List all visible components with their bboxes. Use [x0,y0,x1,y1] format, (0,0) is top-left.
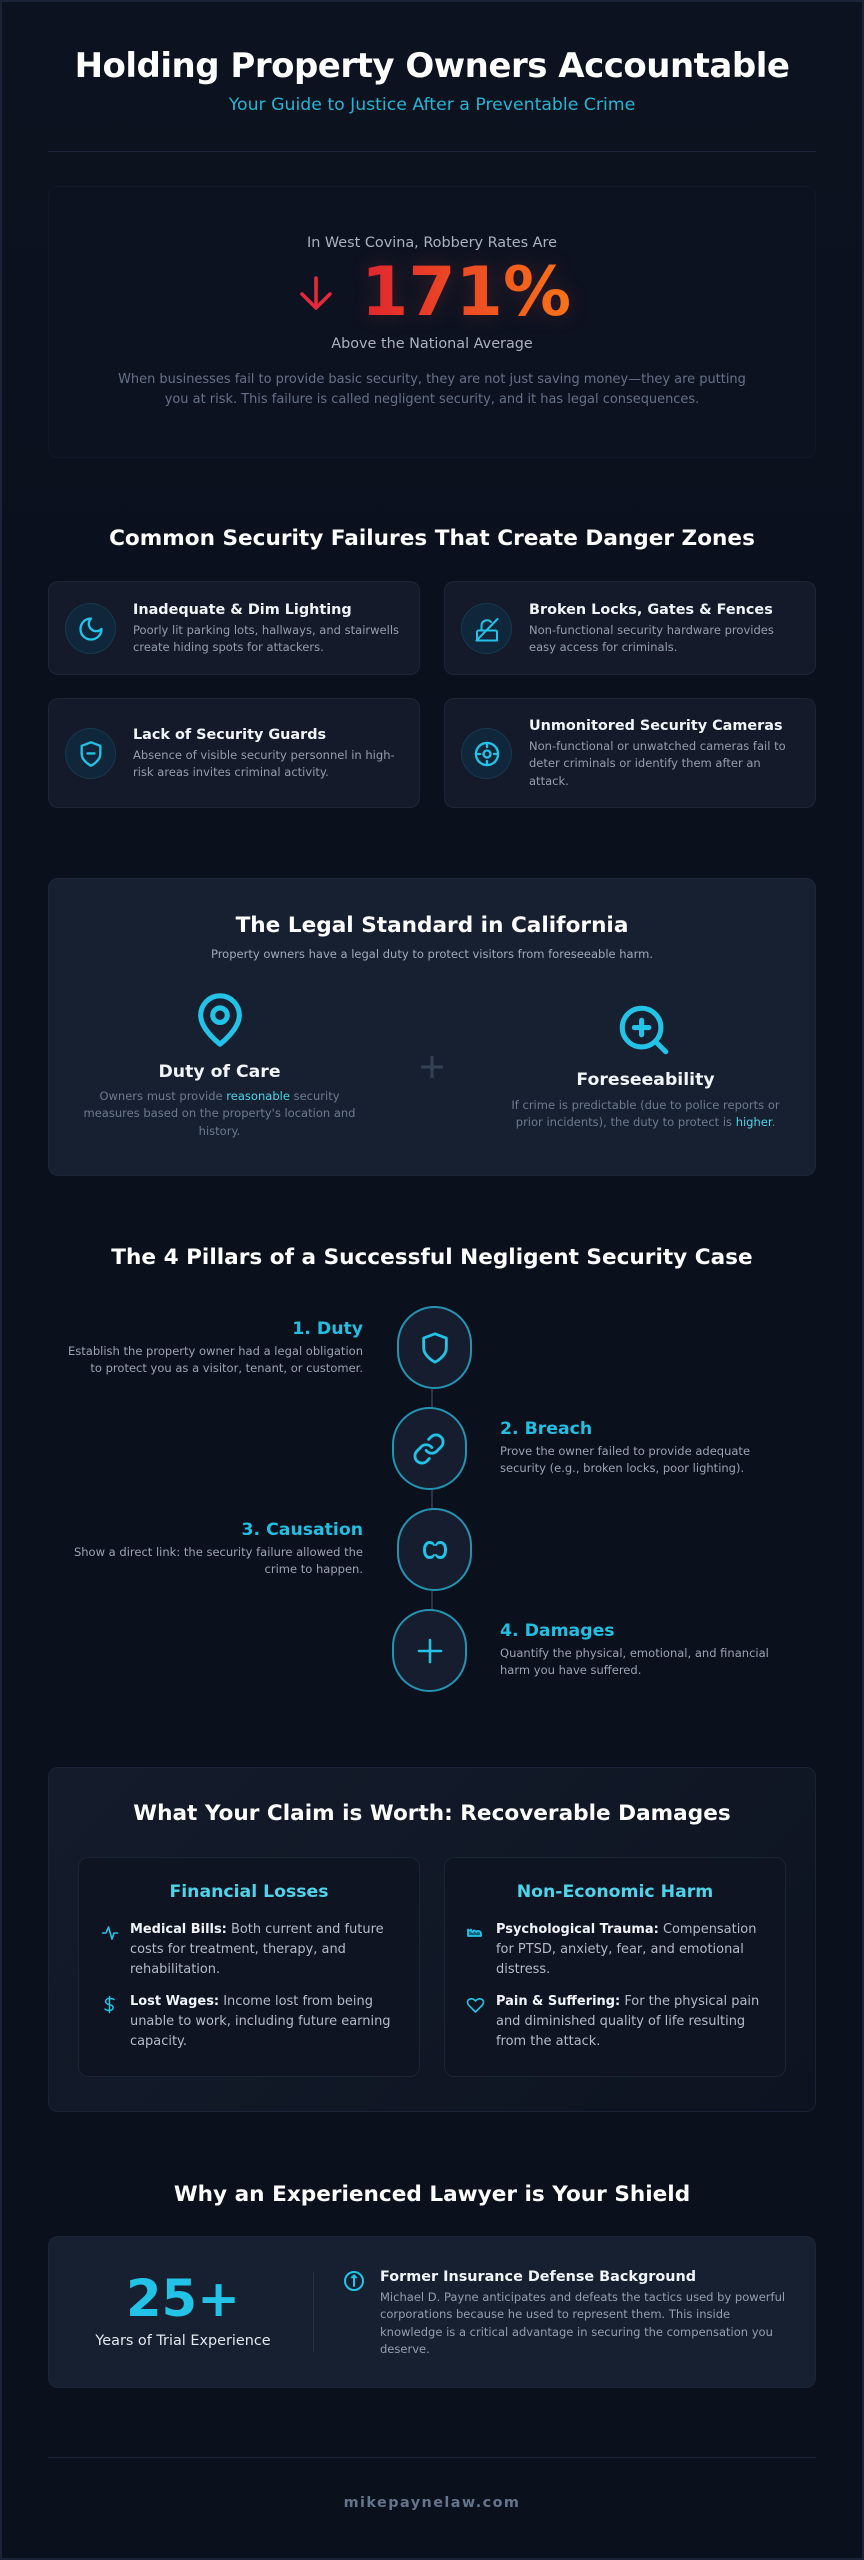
pillar description: Establish the property owner had a legal obligation [68,1344,363,1358]
card heading: Non-Economic Harm [517,1882,713,1902]
item: pain and suffering: Pain & Suffering: For the physical pain [496,1994,759,2009]
heading: common security failures: Common Security Failures That Create Danger Zones [109,526,755,551]
icon: map pin [198,993,242,1047]
years stat number: 25+ [126,2269,240,2329]
icon: shield with minus [65,728,116,779]
item: medical bills: costs for treatment, therapy, and [130,1942,346,1957]
pillar description: Prove the owner failed to provide adequate [500,1444,750,1458]
pillar description [74,1545,363,1576]
pillar description: Show a direct link: the security failure allowed the [74,1545,363,1559]
item: psychological trauma: distress. [496,1962,550,1977]
duty of care text: history. [199,1124,240,1138]
icon: insurance key [344,2271,364,2291]
pillar title: 4. Damages [500,1621,615,1641]
defense background text: Michael D. Payne anticipates and defeats the tactics used by powerful [380,2290,785,2304]
panel: recoverable damages [48,1767,816,2112]
card title: Lack of Security Guards [133,727,326,743]
subtitle: Your Guide to Justice After a Preventable Crime [229,95,635,115]
foreseeability title: Foreseeability [576,1070,715,1090]
duty of care text [83,1089,356,1138]
card description [133,748,395,779]
card: guards [48,698,420,808]
defense background text [380,2290,785,2356]
pillar description [500,1444,750,1475]
pillar 1: duty text [68,1319,363,1375]
hero paragraph: When businesses fail to provide basic security, they are not just saving money—they are putting [118,372,746,387]
card description: Absence of visible security personnel in high- [133,748,395,762]
column: duty of care [83,993,356,1138]
item: medical bills: rehabilitation. [130,1962,220,1977]
card description: Poorly lit parking lots, hallways, and stairwells [133,623,399,637]
duty of care text: Owners must provide reasonable security [99,1089,340,1103]
card: locks [444,581,816,675]
icon: broken lock [461,603,512,654]
item: medical bills: Medical Bills: Both current and future [130,1922,384,1937]
duty of care text: measures based on the property's location and [83,1106,356,1120]
card description: Non-functional or unwatched cameras fail to [529,739,786,753]
card: non-economic harm [444,1857,786,2077]
heading: four pillars: The 4 Pillars of a Successful Negligent Security Case [111,1245,753,1270]
panel intro: Property owners have a legal duty to protect visitors from foreseeable harm. [211,947,653,961]
item: lost wages: unable to work, including future earning [130,2014,391,2029]
card description [529,739,786,788]
column: foreseeability [511,1006,780,1129]
foreseeability text: If crime is predictable (due to police reports or [511,1098,780,1112]
icon: heart [466,1998,484,2013]
pillar 3: causation icon [397,1508,472,1591]
pillar description: harm you have suffered. [500,1663,641,1677]
card description: deter criminals or identify them after an [529,756,761,770]
heading: experienced lawyer: Why an Experienced Lawyer is Your Shield [174,2182,690,2207]
card: financial losses [78,1857,420,2077]
card description: Non-functional security hardware provides [529,623,774,637]
card title: Inadequate & Dim Lighting [133,602,352,618]
icon: moon [65,603,116,654]
pillar title: 3. Causation [242,1520,363,1540]
card description: attack. [529,774,569,788]
panel heading: The Legal Standard in California [236,913,628,938]
defense background title: Former Insurance Defense Background [380,2269,696,2285]
foreseeability text: prior incidents), the duty to protect is higher. [516,1115,775,1129]
panel: hero statistic [48,186,816,458]
item: medical bills [130,1922,384,1977]
card description [529,623,774,654]
defense background text: deserve. [380,2342,430,2356]
pillar 2: breach text [500,1419,750,1475]
card heading: Financial Losses [169,1882,329,1902]
title: Holding Property Owners Accountable [75,46,789,86]
card description: easy access for criminals. [529,640,677,654]
big number 171%: 171% [361,253,571,332]
pillar description: Quantify the physical, emotional, and financial [500,1646,769,1660]
item: pain and suffering [496,1994,759,2049]
item: psychological trauma: Psychological Trauma: Compensation [496,1922,756,1937]
duty of care title: Duty of Care [158,1062,281,1082]
card title: Broken Locks, Gates & Fences [529,602,773,618]
pillar 2: link icon [392,1407,467,1490]
icon: brain [467,1928,482,1937]
icon: plus connector [421,1056,443,1078]
icon: camera target [461,728,512,779]
card description [133,623,399,654]
card title: Unmonitored Security Cameras [529,718,783,734]
pillar 3: causation text [74,1520,363,1576]
defense background text: knowledge is a critical advantage in securing the compensation you [380,2325,773,2339]
panel: legal standard [48,878,816,1176]
pillar 4: plus icon [392,1609,467,1692]
icon: magnifier [620,1006,668,1054]
item: lost wages [130,1994,391,2049]
hero paragraph: you at risk. This failure is called negligent security, and it has legal consequences. [165,392,699,407]
item: lost wages: Lost Wages: Income lost from being [130,1994,373,2009]
card: cameras [444,698,816,808]
item: psychological trauma: for PTSD, anxiety, fear, and emotional [496,1942,744,1957]
item: psychological trauma [496,1922,756,1977]
panel heading: What Your Claim is Worth: Recoverable Damages [133,1801,731,1826]
item: pain and suffering: from the attack. [496,2034,600,2049]
pillar 4: damages text [500,1621,769,1677]
card: lighting [48,581,420,675]
pillar description: security (e.g., broken locks, poor lighting). [500,1461,744,1475]
pillar description [68,1344,363,1375]
stat outro text: Above the National Average [331,336,533,352]
pillar description: crime to happen. [265,1562,363,1576]
item: pain and suffering: and diminished quality of life resulting [496,2014,745,2029]
pillar description [500,1646,769,1677]
defense background text: corporations because he used to represent them. This inside [380,2307,730,2321]
item: lost wages: capacity. [130,2034,187,2049]
foreseeability text [511,1098,780,1129]
stat intro text: In West Covina, Robbery Rates Are [307,235,557,251]
icon: red down arrow [300,276,332,310]
footer website: mikepaynelaw.com [344,2495,520,2511]
icon: activity pulse [102,1926,118,1940]
card description: create hiding spots for attackers. [133,640,324,654]
pillar title: 2. Breach [500,1419,592,1439]
years stat label: Years of Trial Experience [95,2333,271,2349]
pillar 1: shield icon [397,1306,472,1389]
panel: lawyer experience [48,2236,816,2388]
pillar description: to protect you as a visitor, tenant, or customer. [90,1361,363,1375]
pillar title: 1. Duty [292,1319,363,1339]
icon: dollar [104,1996,115,2014]
card description: risk areas invites criminal activity. [133,765,329,779]
header: title and subtitle [75,46,789,115]
hero paragraph [118,372,746,407]
